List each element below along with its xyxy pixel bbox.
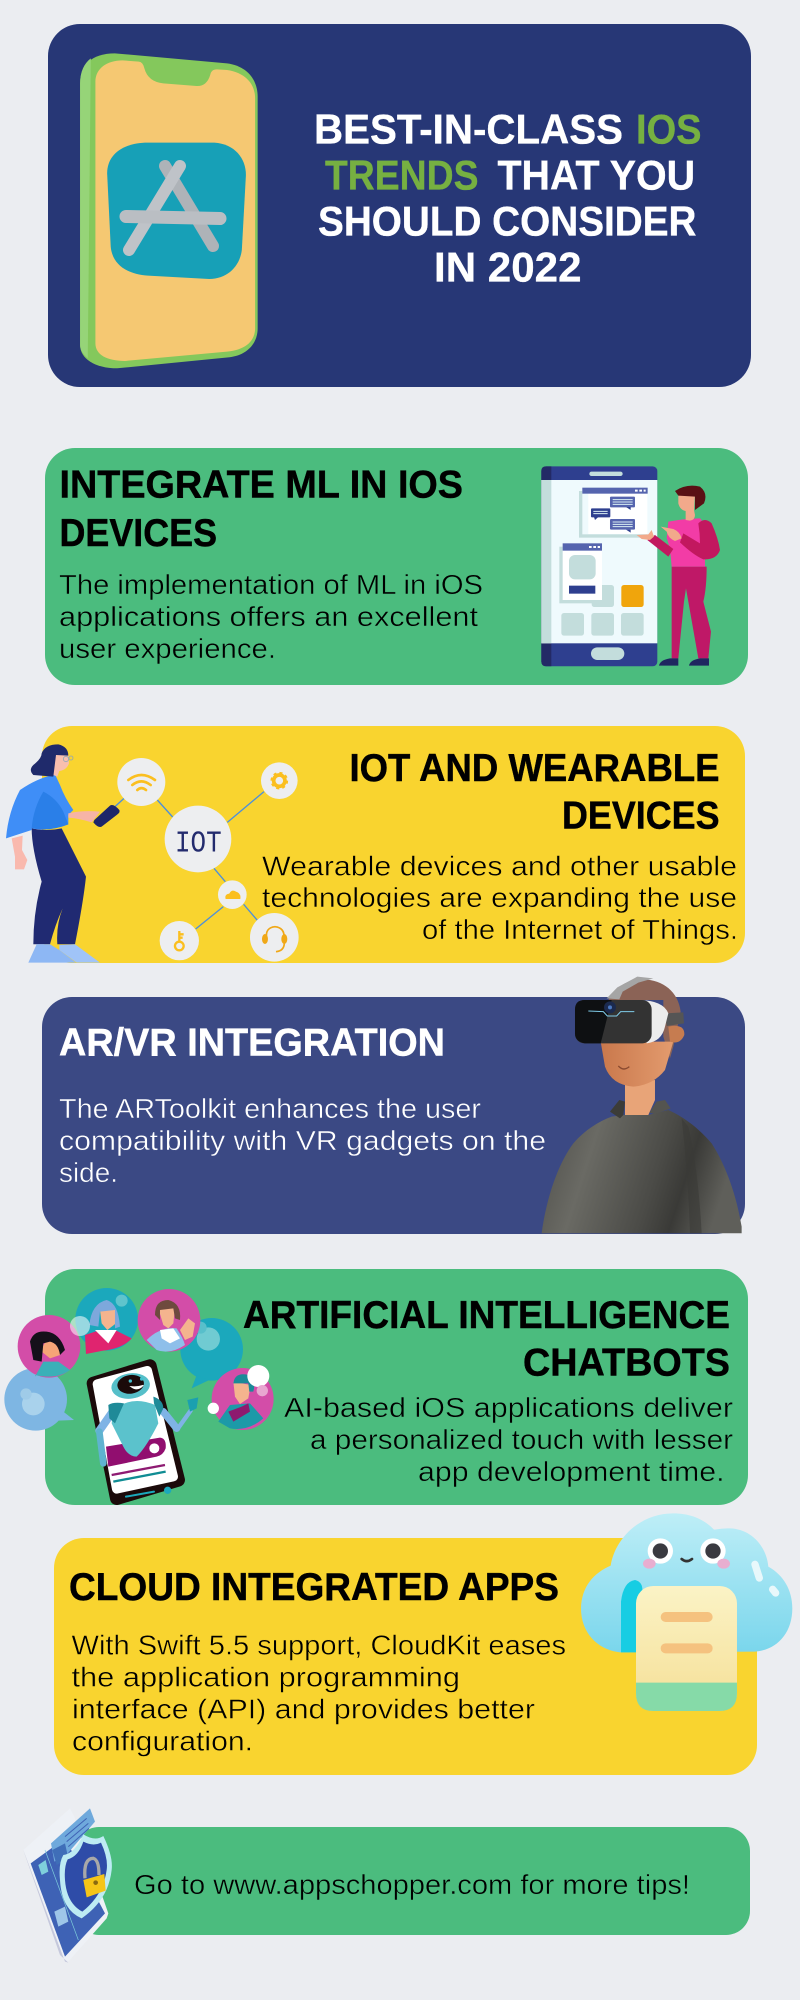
panel: integrate ML	[45, 448, 748, 685]
text: cloud body: the application programming	[72, 1662, 460, 1692]
title: SHOULD CONSIDER	[318, 198, 696, 244]
text: AI body: app development time.	[418, 1456, 724, 1487]
text: AI body	[284, 1392, 733, 1487]
title: BEST-IN-CLASS	[314, 106, 623, 152]
text: IoT body: of the Internet of Things.	[422, 914, 738, 945]
text: AR/VR body: side.	[59, 1157, 118, 1188]
text: IoT body: Wearable devices and other usable	[262, 850, 737, 882]
text: cloud body	[72, 1630, 566, 1756]
title: TRENDS	[325, 152, 478, 198]
text: AI body: a personalized touch with lesser	[310, 1424, 733, 1455]
heading: AI chatbots: ARTIFICIAL INTELLIGENCE	[243, 1294, 730, 1337]
text: AI body: AI-based iOS applications deliver	[284, 1392, 733, 1423]
panel: AR/VR integration	[42, 977, 745, 1234]
panel: header	[48, 24, 751, 387]
panel: artificial intelligence chatbots	[4, 1269, 748, 1505]
text: integrate ML body: user experience.	[59, 633, 276, 664]
heading: IoT and wearable	[350, 747, 720, 838]
heading: AI chatbots	[243, 1294, 730, 1384]
text: integrate ML body: The implementation of ML in iOS	[59, 569, 483, 600]
heading: AR/VR: AR/VR INTEGRATION	[59, 1022, 445, 1064]
text: IoT body: technologies are expanding the use	[262, 882, 737, 913]
heading: AI chatbots: CHATBOTS	[523, 1342, 730, 1384]
text: cloud body: configuration.	[72, 1726, 253, 1756]
text: call to action: Go to www.appschopper.com for more tips!	[134, 1869, 690, 1900]
text: AR/VR body	[59, 1093, 546, 1188]
heading: integrate ML	[60, 464, 463, 555]
text: AR/VR body: compatibility with VR gadgets on the	[59, 1125, 546, 1156]
icon: chatbot on phone with people bubbles	[4, 1288, 274, 1498]
title	[314, 106, 702, 290]
panel: IoT and wearable devices	[6, 726, 745, 963]
title: THAT YOU	[498, 152, 695, 198]
panel: call to action	[23, 1808, 750, 1963]
icon: woman with phone and IoT network	[6, 744, 299, 963]
title: IN 2022	[434, 244, 582, 290]
heading: cloud apps: CLOUD INTEGRATED APPS	[69, 1566, 559, 1609]
heading: IoT and wearable: IOT AND WEARABLE	[350, 747, 720, 790]
text: IoT body	[262, 850, 738, 945]
text: integrate ML body	[59, 569, 483, 664]
text: integrate ML body: applications offers an excellent	[59, 601, 478, 632]
icon: smiling cloud with document	[581, 1513, 792, 1711]
text: AR/VR body: The ARToolkit enhances the user	[59, 1093, 481, 1124]
panel: cloud integrated apps	[54, 1513, 792, 1775]
text: cloud body: interface (API) and provides better	[72, 1694, 535, 1724]
title: IOS	[636, 106, 702, 152]
icon: person beside phone with chat windows	[541, 466, 720, 666]
heading: IoT and wearable: DEVICES	[562, 794, 720, 838]
icon: man wearing VR headset	[542, 977, 742, 1233]
heading: integrate ML: DEVICES	[60, 512, 217, 555]
icon: phone with security shield	[23, 1808, 112, 1963]
icon: phone with app store logo	[80, 53, 258, 368]
text: cloud body: With Swift 5.5 support, CloudKit eases	[72, 1630, 566, 1660]
icon: woman with phone and IoT network: IOT	[175, 827, 222, 862]
heading: integrate ML: INTEGRATE ML IN IOS	[60, 464, 463, 506]
